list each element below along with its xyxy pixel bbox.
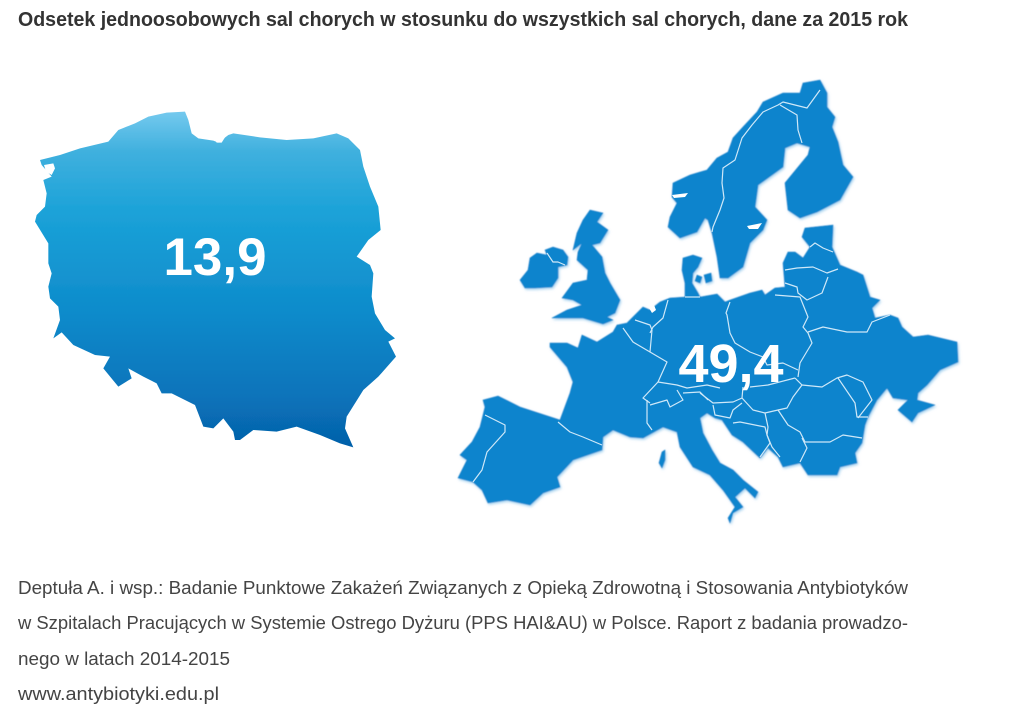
source text: [17, 577, 909, 704]
value: Europe: 49,4: [678, 334, 784, 394]
map: Europe: [458, 80, 958, 523]
title: Odsetek jednoosobowych sal chorych w stosunku do wszystkich sal chorych, dane za 2015 rok: [18, 9, 909, 31]
source text: www.antybiotyki.edu.pl: [17, 683, 219, 704]
source text: Deptuła A. i wsp.: Badanie Punktowe Zakażeń Związanych z Opieką Zdrowotną i Stosowania Antybiotyków: [18, 577, 909, 598]
map: Poland: [35, 112, 396, 447]
source text: nego w latach 2014-2015: [18, 648, 230, 669]
inland water: [649, 100, 762, 313]
value: Poland: 13,9: [164, 228, 266, 287]
landmasses: [458, 80, 958, 523]
source text: w Szpitalach Pracujących w Systemie Ostrego Dyżuru (PPS HAI&AU) w Polsce. Raport z badania prowadzo-: [17, 612, 908, 633]
borders: [473, 90, 890, 482]
